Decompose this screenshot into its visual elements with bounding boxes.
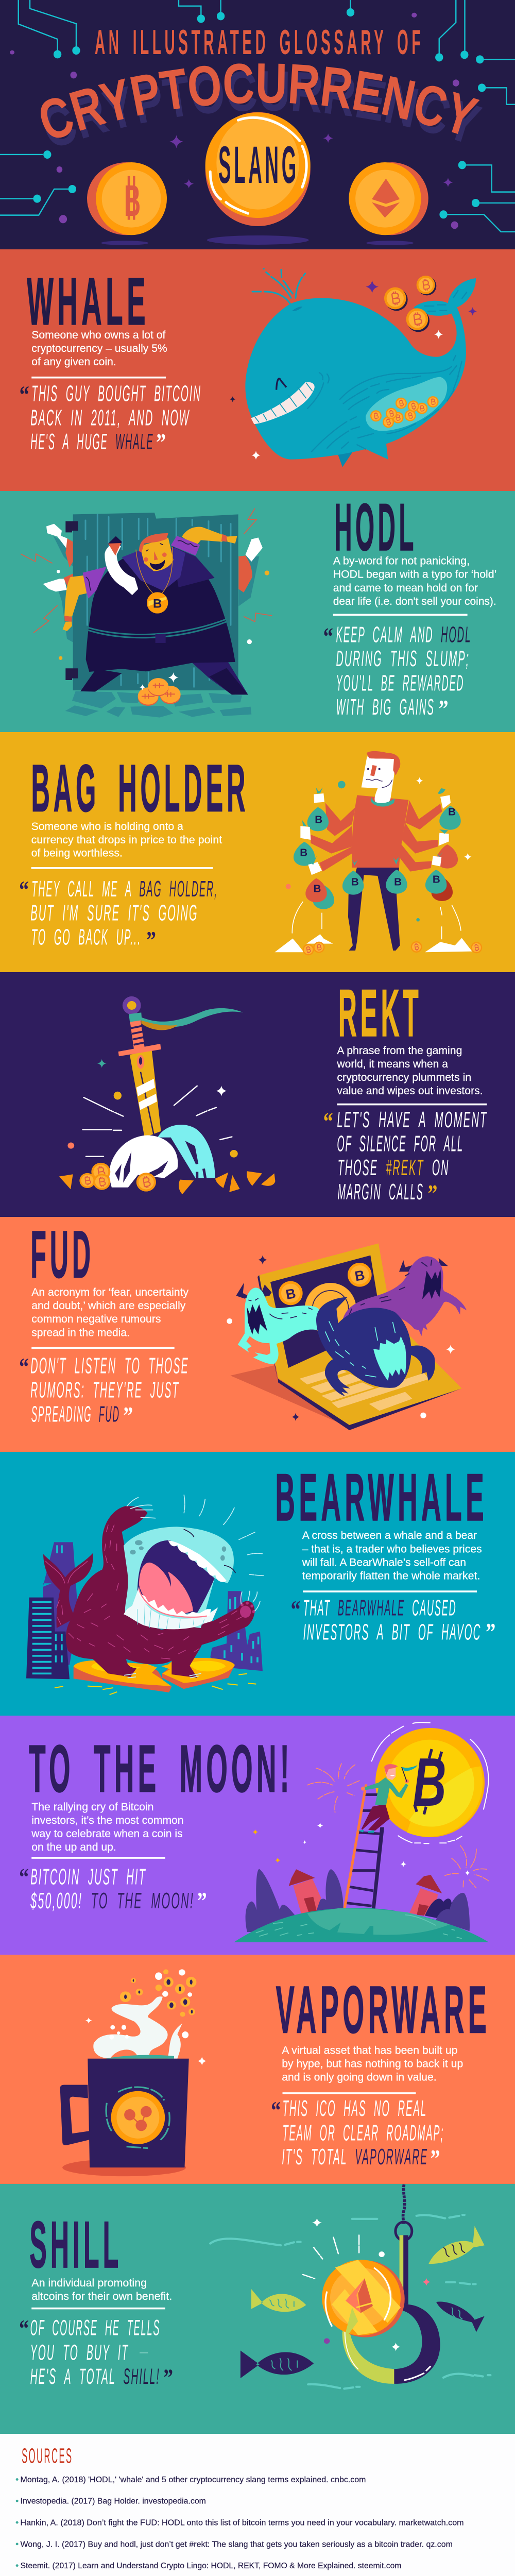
quote: ” [123,1402,133,1430]
definition [31,1286,188,1349]
quote: “ [323,1108,333,1135]
quote: “ [323,623,333,650]
definition [333,554,496,616]
title: cryptocurrency: CRYPTOCURRENCY [41,63,483,145]
quote: THOSE #REKT ON [338,1155,450,1180]
fish [241,2226,485,2378]
quote: $50,000! TO THE MOON! [30,1888,194,1913]
panel: to the moon [0,1716,515,1955]
medallion [136,547,173,614]
claws and motion lines [125,1495,264,1678]
quote: “ [19,2315,29,2342]
waves [210,2215,490,2388]
steam [93,1996,182,2060]
quote: “ [271,2096,281,2124]
definition: cryptocurrency – usually 5% [31,342,167,354]
door [53,513,259,690]
fud text [19,1217,189,1430]
arms [311,800,442,872]
panel: shill: OF COURSE HE TELLS [30,2316,160,2340]
head [139,533,174,571]
circuit lines [0,0,515,232]
ladder [341,1784,384,1926]
panel: header [0,0,515,249]
quote: ” [431,2145,440,2173]
quote: ” [438,695,449,723]
panel: whale [0,249,515,492]
icon: ethereum coin [349,162,428,235]
mug shadow [62,2159,186,2176]
quote: THEY CALL ME A BAG HOLDER, [31,876,218,902]
definition: Someone who is holding onto a [31,820,184,833]
quote: ” [163,2364,173,2392]
definition: A virtual asset that has been built up [282,2044,457,2056]
torso [352,795,408,868]
bags: B [394,876,402,888]
definition: will fall. A BearWhale’s sell-off can [302,1556,466,1568]
panel: fud [0,1217,515,1452]
definition: cryptocurrency plummets in [337,1071,471,1083]
definition: of being worthless. [31,846,123,859]
illustration: sword and skulls [59,996,275,1194]
coins and rays [59,1059,275,1194]
illustration: vapor mug [60,1969,207,2176]
definition [282,2044,463,2094]
definition: The rallying cry of Bitcoin [31,1800,153,1813]
quote [19,1863,207,1915]
definition: by hype, but has nothing to back it up [282,2057,463,2070]
quote: HE'S A TOTAL SHILL! [30,2364,160,2389]
source list: Montag, A. (2018) 'HODL,' 'whale' and 5 other cryptocurrency slang terms explained. cnbc.com [21,2475,366,2484]
quote [323,622,471,723]
definition: dear life (i.e. don't sell your coins). [333,595,496,607]
houses and bushes [246,1869,470,1932]
source list: Hankin, A. (2018) Don’t fight the FUD: HODL onto this list of bitcoin terms you need in your vocabulary. marketwatch.com [21,2518,464,2527]
definition: spread in the media. [31,1326,130,1338]
quote [323,1107,487,1208]
panel: bearwhale [0,1452,515,1716]
definition: on the up and up. [31,1841,116,1853]
sparkles [227,1255,455,1421]
quote [290,1596,495,1646]
monster: teal [236,1282,320,1364]
hodl text [323,490,496,723]
source list: Wong, J. I. (2017) Buy and hodl, just don’t get #rekt: The slang that gets you taken seriously as a bitcoin trader. qz.com [21,2539,453,2549]
quote: BITCOIN JUST HIT [30,1865,146,1889]
definition: altcoins for their own benefit. [31,2290,172,2302]
whale head [124,1527,235,1629]
moon coin [372,1722,488,1843]
moon text [19,1732,293,1915]
quote: SPREADING FUD [31,1401,120,1427]
panel: whale: THIS GUY BOUGHT BITCOIN [31,381,201,406]
source list [16,2475,464,2570]
hook [342,2184,440,2384]
definition: common negative rumours [31,1313,161,1325]
quote [20,381,201,456]
definition: A phrase from the gaming [337,1044,462,1057]
bags: B [315,814,322,825]
panel: shill [0,2184,515,2434]
mug [60,2059,189,2167]
definition: A by-word for not panicking, [333,554,470,567]
bag holder text [19,751,249,954]
panel: rekt [0,972,515,1217]
definition: and came to mean hold on for [333,581,478,594]
definition: currency that drops in price to the point [31,833,222,846]
quote: “ [19,1863,29,1891]
quote: “ [19,1353,29,1381]
quote [271,2096,444,2173]
sword [118,996,243,1138]
trousers [348,867,400,951]
definition: and is only going down in value. [282,2071,437,2083]
definition [302,1529,482,1592]
side arms [43,524,263,592]
piles and coins [274,777,482,955]
illustration: laptop and monsters [227,1243,467,1430]
definition [31,2277,172,2309]
definition [31,1800,184,1859]
quote: HE'S A HUGE WHALE [30,429,153,454]
laptop: B [285,1285,297,1302]
illustration: climbing to the moon [234,1722,489,1942]
skulls [109,1125,215,1188]
city [26,1542,263,1679]
bags: B [300,847,307,859]
illustration: hook and fish [210,2184,490,2388]
definition: HODL began with a typo for ‘hold’ [333,568,496,581]
bags [294,787,461,909]
sparkles [303,2218,431,2351]
quote: “ [290,1596,301,1623]
panel: sources: SOURCES [22,2444,73,2467]
definition: Someone who owns a lot of [31,328,166,341]
coin shadows [101,235,414,245]
quote: ” [486,1618,495,1646]
definition: An individual promoting [31,2277,147,2289]
icon: bitcoin coin [87,162,167,235]
quote: ” [146,926,156,954]
source list: Steemit. (2017) Learn and Understand Crypto Lingo: HODL, REKT, FOMO & More Explained. steemit.com [21,2561,401,2570]
fud text: FUD [30,1217,94,1292]
panel: sources [0,2434,515,2576]
bags: B [351,876,359,888]
bearwhale text [275,1460,495,1646]
definition [336,1044,487,1105]
fireworks and stars [252,1764,489,1888]
whale text: WHALE [27,264,149,339]
arms [63,527,237,631]
illustration: man with bags [274,751,482,955]
paving and coins [65,672,251,718]
legs and cloak [78,546,248,694]
definition [31,820,222,869]
fur marks [45,1525,255,1659]
panel: whale: BACK IN 2011, AND NOW [30,405,190,430]
icon: whale [230,269,477,467]
definition: world, it means when a [336,1058,449,1070]
panel: fud: DON'T LISTEN TO THOSE [30,1353,189,1378]
illustration: bearwhale [26,1495,264,1694]
quote [19,2315,173,2392]
bags: B [433,873,440,885]
coin letter: B [124,177,141,226]
laptop: B [354,1267,366,1284]
definition: – that is, a trader who believes prices [302,1543,482,1555]
panel: vaporware [0,1955,515,2184]
quote: ” [156,429,166,456]
bubbles and coins [85,1969,207,2065]
definition: temporarily flatten the whole market. [302,1569,480,1582]
panel: header: SLANG [218,135,299,194]
moon coin: B [413,1744,447,1821]
panel: bag holder [0,732,515,973]
quote: ” [427,1180,438,1208]
sparks [21,509,272,660]
bear body [43,1506,254,1678]
definition: way to celebrate when a coin is [31,1827,183,1840]
hill [234,1908,489,1942]
quote [19,876,218,954]
rekt text [323,976,487,1208]
bags: B [448,806,456,818]
illustration: hodler [21,509,272,718]
panel: fud: RUMORS: THEY'RE JUST [30,1378,179,1402]
quote: YOU TO BUY IT [30,2341,129,2365]
panel: hodl [0,490,515,733]
definition: and doubt,’ which are especially [31,1299,185,1312]
quote: TO GO BACK UP... [31,924,141,950]
source list: Investopedia. (2017) Bag Holder. investopedia.com [21,2496,206,2506]
quote: “ [20,381,29,409]
definition [31,328,167,379]
coin [322,2260,405,2369]
definition: An acronym for ‘fear, uncertainty [31,1286,188,1298]
shill text: SHILL [29,2208,122,2282]
medallion: B [153,597,162,611]
shill text [19,2208,173,2392]
quote: “ [19,876,29,904]
definition: value and wipes out investors. [337,1084,483,1097]
quote: ” [197,1887,207,1915]
whale text [20,264,201,456]
definition: investors, it’s the most common [31,1814,184,1826]
bag holder text: BUT I'M SURE IT'S GOING [30,901,198,925]
icon: slang coin [205,112,311,226]
quote [19,1353,189,1430]
definition: of any given coin. [31,355,116,368]
vaporware text [271,1972,490,2173]
climber [358,1764,418,1833]
laptop [230,1243,462,1430]
ground [55,1658,256,1694]
bags: B [314,883,321,895]
head [362,751,400,807]
monster: purple [342,1256,467,1336]
monster: navy [316,1297,435,1396]
definition: A cross between a whale and a bear [302,1529,477,1541]
